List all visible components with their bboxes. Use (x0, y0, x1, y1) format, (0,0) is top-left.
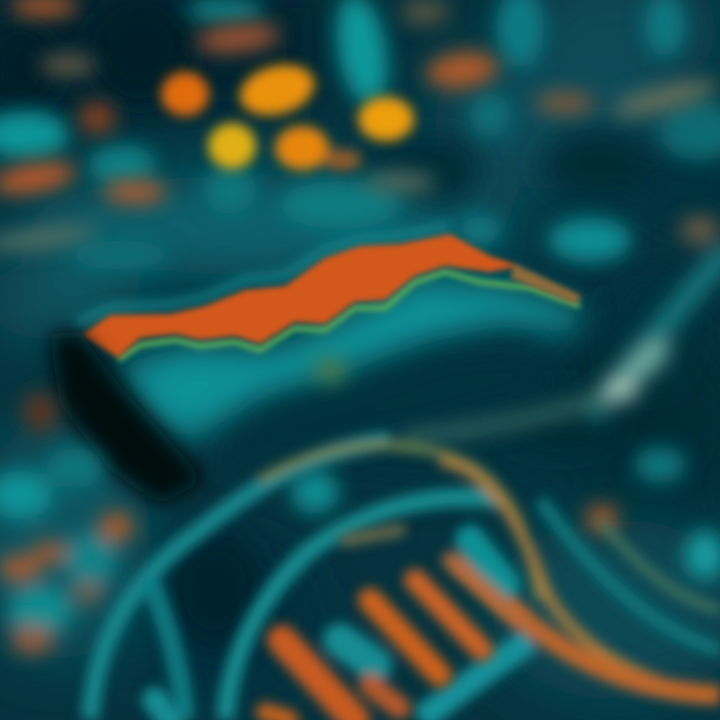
helix strands (90, 440, 720, 720)
lower-left teal and orange blobs (0, 447, 720, 654)
waveform orange band (82, 234, 582, 358)
waveform green edge (118, 272, 580, 360)
waveform upper teal edge (75, 226, 450, 325)
helix rungs (155, 530, 520, 720)
brown and orange top strokes (0, 0, 720, 256)
black diagonal shadow (50, 330, 205, 505)
top teal blobs (0, 0, 720, 269)
waveform teal underside (120, 280, 585, 440)
waveform dark underside (210, 345, 570, 470)
mid-right pale highlights (22, 216, 720, 440)
yellow-orange glowing dots (161, 57, 414, 171)
